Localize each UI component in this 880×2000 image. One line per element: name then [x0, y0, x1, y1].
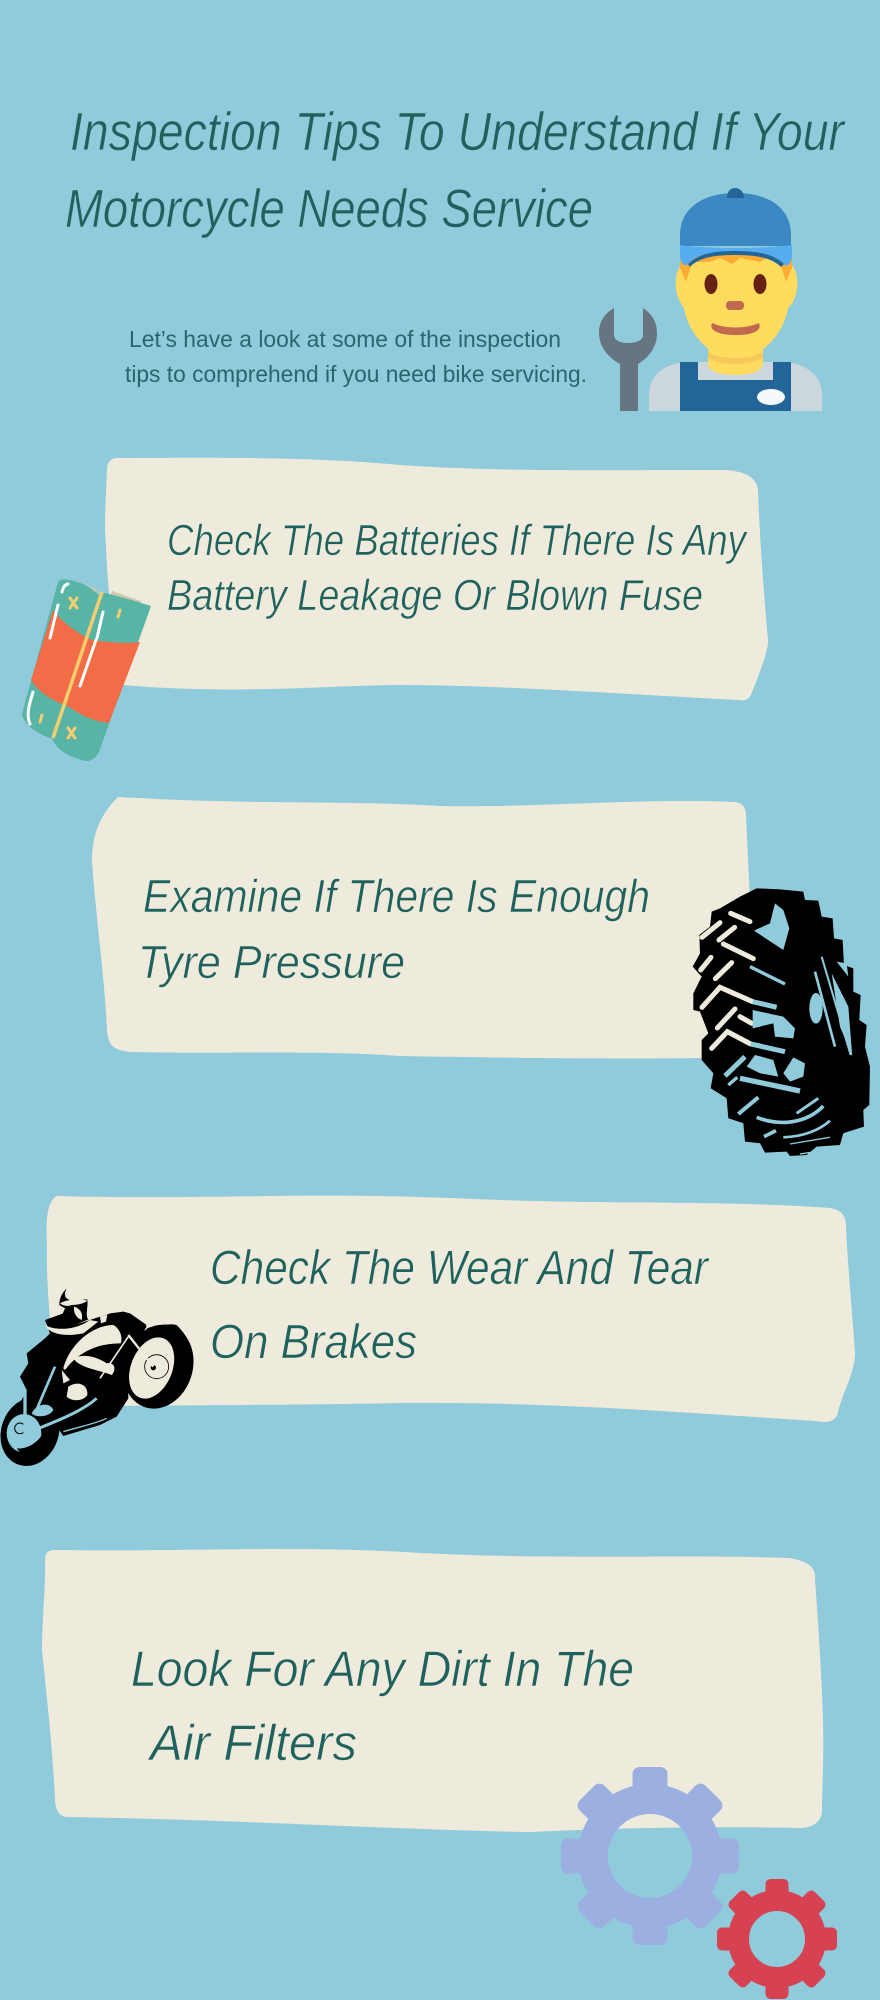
- title: Motorcycle Needs Service: [65, 179, 593, 239]
- heading: air filters: [131, 1641, 634, 1771]
- icon: small red gear: [717, 1879, 837, 1999]
- icon: motorcycle: [0, 1288, 204, 1474]
- tread, over background: [725, 957, 851, 1154]
- front wheel: [112, 1315, 204, 1418]
- left cell: [22, 579, 103, 740]
- mouth: [711, 323, 760, 335]
- heading: batteries: [167, 516, 748, 620]
- intro text: tips to comprehend if you need bike servicing.: [125, 361, 587, 387]
- body: [20, 1312, 147, 1436]
- hair: [680, 250, 792, 282]
- shirt: [649, 362, 822, 411]
- tread cut-outs: [747, 903, 852, 1082]
- overalls: [680, 362, 791, 411]
- sparkles: [40, 598, 120, 738]
- icon: wrench: [599, 308, 657, 411]
- heading: tyre pressure: Examine If There Is Enough: [143, 870, 650, 922]
- panel: tyre pressure: [92, 797, 752, 1059]
- orange band: [31, 610, 140, 723]
- icon: large blue gear: [561, 1767, 739, 1945]
- exhaust pipes: [25, 1367, 107, 1433]
- heading: air filters: Air Filters: [147, 1715, 357, 1771]
- cap button: [727, 188, 744, 198]
- cap crown: [680, 193, 791, 246]
- icon: tyre: [693, 888, 870, 1156]
- overalls button: [757, 389, 785, 405]
- highlights: [28, 584, 103, 724]
- right cell: [52, 592, 151, 761]
- rider: [45, 1320, 98, 1335]
- panel: air filters: [42, 1549, 823, 1832]
- icon: batteries: [22, 579, 151, 761]
- heading: brakes: On Brakes: [210, 1316, 417, 1369]
- ears: [676, 262, 797, 310]
- icon: mechanic: [649, 188, 822, 411]
- title: [65, 102, 846, 239]
- heading: tyre pressure: [138, 870, 650, 988]
- nose: [726, 301, 744, 310]
- neck: [708, 340, 763, 375]
- tread, over card: [701, 913, 753, 1048]
- rear wheel: [0, 1389, 69, 1474]
- heading: brakes: Check The Wear And Tear: [210, 1242, 710, 1295]
- intro text: [125, 326, 587, 387]
- heading: batteries: Battery Leakage Or Blown Fuse: [167, 571, 703, 620]
- heading: brakes: [210, 1242, 710, 1369]
- face: [682, 250, 790, 358]
- heading: tyre pressure: Tyre Pressure: [138, 936, 405, 988]
- tank: [63, 1325, 122, 1370]
- yellow strap: [53, 592, 102, 738]
- cap brim: [680, 245, 792, 266]
- intro text: Let’s have a look at some of the inspection: [129, 326, 561, 352]
- panel: batteries: [105, 458, 768, 700]
- panel: brakes: [47, 1196, 855, 1422]
- heading: batteries: Check The Batteries If There Is Any: [167, 516, 748, 565]
- eyes: [704, 274, 718, 294]
- heading: air filters: Look For Any Dirt In The: [131, 1641, 634, 1697]
- engine: [62, 1356, 114, 1400]
